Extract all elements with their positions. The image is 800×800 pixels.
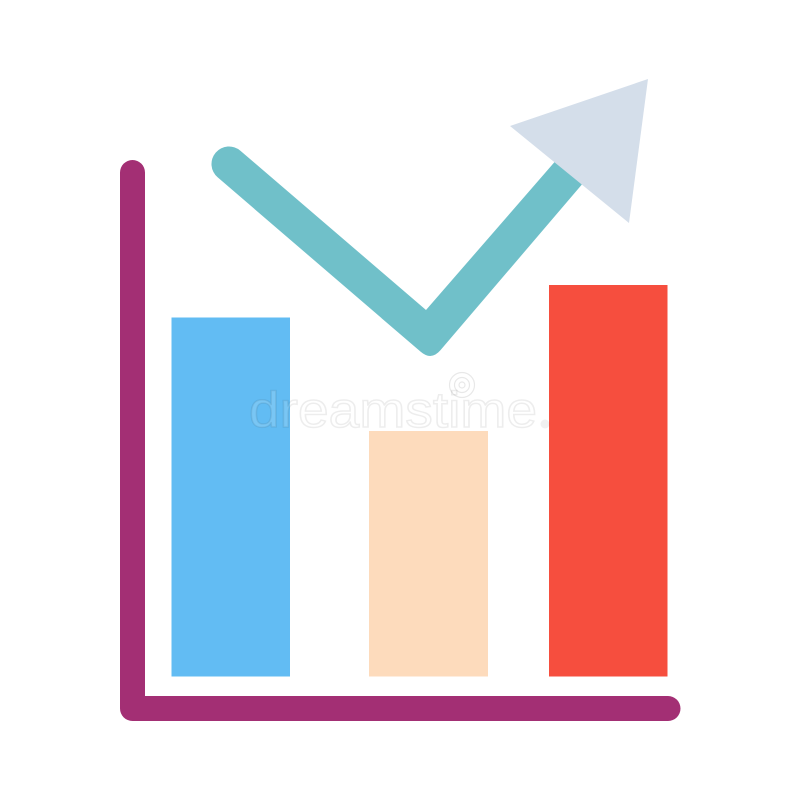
watermark dot — [540, 420, 550, 428]
chart axes — [132, 172, 668, 708]
bar: peach — [369, 431, 488, 676]
watermark logo: spiral — [450, 372, 474, 398]
bar: blue — [172, 318, 290, 676]
watermark text: dreamstime — [249, 382, 537, 438]
bar: red — [549, 285, 668, 676]
watermark — [249, 372, 550, 438]
trend line — [211, 146, 590, 356]
arrowhead — [510, 79, 648, 223]
